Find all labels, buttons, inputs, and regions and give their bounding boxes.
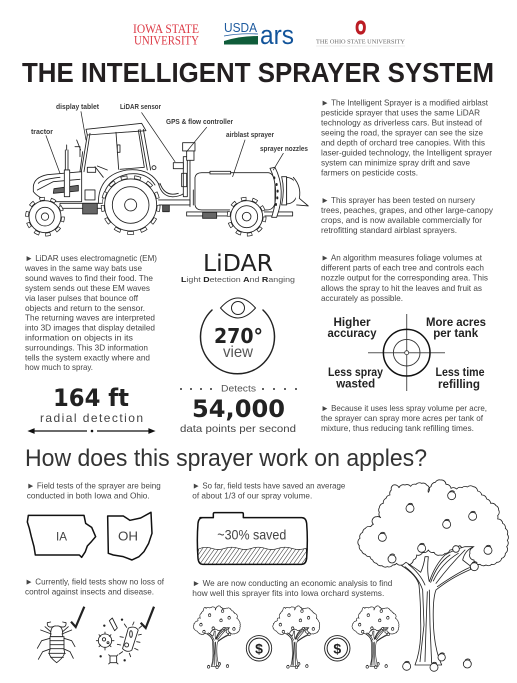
text block: algorithm: nozzle output for the corresponding area. This xyxy=(321,272,488,282)
text block: less spray volume xyxy=(321,403,487,433)
logo: The Ohio State University xyxy=(316,18,406,46)
text block: economic analysis: ► We are now conducting an economic analysis to find xyxy=(192,578,393,588)
icon: crosshair target xyxy=(368,314,445,391)
icon: small tree 1 xyxy=(193,606,240,669)
logo: Iowa State University: UNIVERSITY xyxy=(134,32,200,48)
icon: eye with 270 degree view: 270° xyxy=(214,324,263,348)
heading: LiDAR xyxy=(181,251,295,284)
label: GPS and flow controller: GPS & flow controller xyxy=(166,119,233,126)
icon: check mark for disease xyxy=(141,607,154,628)
icon: spray tank with 30 percent saved: ~30% saved xyxy=(217,526,286,542)
benefit: less time refilling: Less time xyxy=(436,365,485,379)
text block: algorithm: ► An algorithm measures foliage volumes at xyxy=(321,252,483,262)
text block: LiDAR explanation: The returning waves are interpreted xyxy=(25,312,155,322)
diagram: tractor with airblast sprayer xyxy=(27,104,308,235)
icon: disease microbes xyxy=(96,618,142,664)
benefit: more acres per tank: per tank xyxy=(433,326,479,340)
benefit: higher accuracy: accuracy xyxy=(328,326,377,340)
text block: economic analysis: how well this sprayer fits into Iowa orchard systems. xyxy=(192,588,384,598)
text block: intelligent sprayer intro: system can minimize spray drift and save xyxy=(321,158,470,168)
text block: algorithm: allows the spray to hit the leaves and fruit as xyxy=(321,283,482,293)
icon: small tree 3 xyxy=(352,606,399,669)
text block: algorithm: accurately as possible. xyxy=(321,293,403,303)
benefit: more acres per tank xyxy=(426,315,486,340)
row of small trees and coins xyxy=(193,606,399,669)
text block: intelligent sprayer intro: laser-guided technology, the Intelligent sprayer xyxy=(321,148,492,158)
text block: where the sprayer has been tested: ► This sprayer has been tested on nursery xyxy=(321,195,476,205)
text block: LiDAR explanation: how much to spray. xyxy=(25,362,93,372)
tractor front wheel xyxy=(27,199,63,235)
text block: intelligent sprayer intro: farmers on pesticide costs. xyxy=(321,168,418,178)
sprayer wheel xyxy=(229,199,265,235)
stat: detects 54,000 data points per second: Detects xyxy=(221,384,257,394)
icon: dollar coin 1 xyxy=(246,636,272,661)
text block: LiDAR explanation: via laser pulses that bounce off xyxy=(25,293,139,303)
stat: 164 ft radial detection: radial detection xyxy=(40,411,143,425)
stat: detects 54,000 data points per second: 54,000 xyxy=(192,395,285,423)
text block: intelligent sprayer intro xyxy=(321,98,492,178)
text block: where the sprayer has been tested: trees, peaches, grapes, and other large-canopy xyxy=(321,205,494,215)
text block: LiDAR explanation: into 3D images that display detailed xyxy=(25,322,155,332)
text block: less spray volume: ► Because it uses less spray volume per acre, xyxy=(321,403,487,413)
benefit: less spray wasted xyxy=(328,365,383,390)
text block: LiDAR explanation: ► LiDAR uses electromagnetic (EM) xyxy=(25,253,157,263)
text block: no loss of control: control against insects and disease. xyxy=(25,586,154,596)
arrows: detection range xyxy=(29,429,154,433)
heading: LiDAR: LiDAR xyxy=(203,251,273,277)
logo: Iowa State University xyxy=(133,21,200,48)
stat: 164 ft radial detection xyxy=(29,384,154,433)
text block: no loss of control xyxy=(25,576,165,596)
text block: where the sprayer has been tested: retrofitting standard airblast sprayers. xyxy=(321,225,457,235)
benefit: less time refilling xyxy=(436,365,485,391)
text block: intelligent sprayer intro: pesticide sprayer that uses the same LiDAR xyxy=(321,108,480,118)
text block: LiDAR explanation: objects and return to the sensor. xyxy=(25,303,145,313)
icon: small tree 2 xyxy=(273,606,320,669)
tractor rear wheel xyxy=(103,177,159,233)
text block: no loss of control: ► Currently, field tests show no loss of xyxy=(25,576,165,586)
heading: how does this sprayer work on apples: How does this sprayer work on apples? xyxy=(25,445,427,472)
label: sprayer nozzles: sprayer nozzles xyxy=(260,146,308,153)
icon: Ohio outline: OH xyxy=(118,529,138,544)
icon: check mark for insects xyxy=(71,607,84,627)
text block: where the sprayer has been tested xyxy=(321,195,494,235)
text block: LiDAR explanation xyxy=(24,253,157,372)
text block: LiDAR explanation: surroundings. This 3D information xyxy=(25,342,148,352)
label: LiDAR sensor: LiDAR sensor xyxy=(120,104,161,111)
tractor and sprayer line drawing xyxy=(27,112,308,235)
benefit: less spray wasted: Less spray xyxy=(328,365,383,379)
icon: insect xyxy=(37,622,75,663)
text block: algorithm: different parts of each tree and controls each xyxy=(321,262,484,272)
text block: field tests: ► Field tests of the sprayer are being xyxy=(27,480,161,490)
icon: spray tank with 30 percent saved xyxy=(197,513,307,564)
text block: less spray volume: mixture, thus reducing tank refilling times. xyxy=(321,423,474,433)
text block: algorithm xyxy=(321,252,488,303)
text block: LiDAR explanation: tells the system exactly where and xyxy=(25,352,150,362)
logo: USDA ARS xyxy=(224,20,294,50)
benefit: higher accuracy xyxy=(328,315,377,340)
text block: spray volume saved xyxy=(192,480,346,500)
stat: detects 54,000 data points per second: data points per second xyxy=(180,423,296,435)
benefit: more acres per tank: More acres xyxy=(426,315,486,329)
text block: LiDAR explanation: information on objects in its xyxy=(25,332,133,342)
text block: where the sprayer has been tested: crops, and is now available commercially for xyxy=(321,215,482,225)
benefit: less spray wasted: wasted xyxy=(335,376,375,390)
logo: The Ohio State University: O xyxy=(356,18,366,38)
icon: eye with 270 degree view xyxy=(200,298,274,374)
benefit: less time refilling: refilling xyxy=(438,377,480,391)
text block: LiDAR explanation: waves in the same way bats use xyxy=(24,263,142,273)
text block: spray volume saved: of about 1/3 of our spray volume. xyxy=(192,490,312,500)
logo: USDA ARS: USDA xyxy=(224,20,257,35)
icon: Iowa outline: IA xyxy=(56,530,67,544)
text block: LiDAR explanation: sound waves to find their food. The xyxy=(25,273,153,283)
icon: large apple tree xyxy=(358,480,508,671)
label: tractor: tractor xyxy=(31,129,53,136)
text block: field tests: conducted in both Iowa and Ohio. xyxy=(27,490,150,500)
text block: intelligent sprayer intro: seeing the road, the sprayer can see the size xyxy=(321,128,483,138)
text block: spray volume saved: ► So far, field tests have saved an average xyxy=(192,480,346,490)
logo: Iowa State University: IOWA STATE xyxy=(133,21,199,36)
icon: eye with 270 degree view: view xyxy=(223,344,253,361)
icon: dollar coin 2 xyxy=(325,636,350,661)
logo: USDA ARS: ars xyxy=(260,20,294,50)
stat: 164 ft radial detection: 164 ft xyxy=(53,384,129,412)
text block: intelligent sprayer intro: ► The Intelligent Sprayer is a modified airblast xyxy=(321,98,489,108)
text block: economic analysis xyxy=(192,578,393,598)
text block: LiDAR explanation: system sends out these EM waves xyxy=(25,283,150,293)
target diagram with four benefits xyxy=(328,314,486,391)
text block: intelligent sprayer intro: and depth of orchard tree canopies. With this xyxy=(321,138,485,148)
text block: field tests xyxy=(27,480,161,500)
text block: less spray volume: the sprayer can spray more acres per tank of xyxy=(321,413,484,423)
logo: The Ohio State University: THE OHIO STATE UNIVERSITY xyxy=(316,40,406,46)
label: display tablet: display tablet xyxy=(56,104,100,111)
stat: detects 54,000 data points per second xyxy=(180,384,297,435)
benefit: higher accuracy: Higher xyxy=(334,315,371,329)
icon: Iowa outline xyxy=(27,515,96,557)
text block: intelligent sprayer intro: technology as driverless cars. But instead of xyxy=(321,118,483,128)
heading: LiDAR: Light Detection And Ranging xyxy=(181,275,295,284)
label: airblast sprayer: airblast sprayer xyxy=(226,132,274,139)
icon: Ohio outline xyxy=(108,512,152,560)
